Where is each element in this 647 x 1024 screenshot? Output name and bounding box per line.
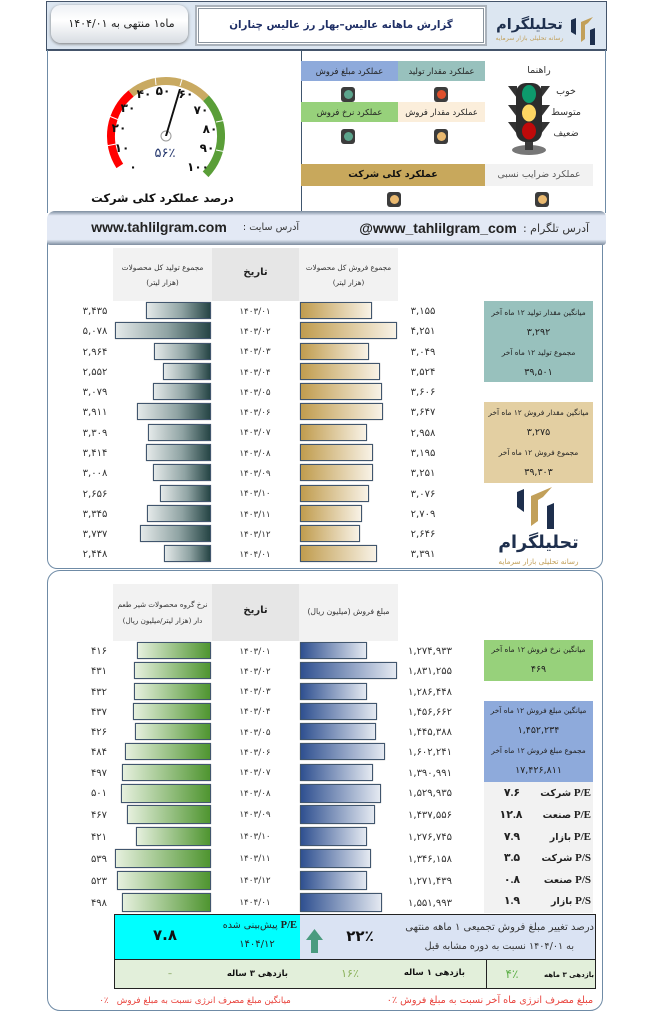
1-year label: بازدهی ۱ ساله xyxy=(404,968,465,978)
dates column xyxy=(239,306,271,560)
panel: sales change xyxy=(300,914,596,960)
date pill xyxy=(51,5,188,43)
summary: sales amount xyxy=(484,701,593,782)
indicator: ratios xyxy=(535,192,549,207)
dates column: ۱۴۰۳/۰۵ xyxy=(239,388,271,398)
panel: top header xyxy=(46,1,607,51)
label: production performance: عملکرد مقدار تولید xyxy=(409,66,474,76)
chart: production bars xyxy=(114,302,212,562)
table header: date xyxy=(212,248,299,301)
3-year value: – xyxy=(168,969,172,978)
summary: production: میانگین مقدار تولید ۱۲ ماه آخر xyxy=(491,308,586,317)
dates column 2: ۱۴۰۳/۰۳ xyxy=(239,687,271,697)
table header: production xyxy=(113,248,212,301)
summary: sales amount: ۱۷,۴۲۶,۸۱۱ xyxy=(515,765,562,776)
legend good: خوب xyxy=(556,86,576,97)
chart: gauge: ۰ xyxy=(129,160,137,174)
summary: sales quantity: ۳,۲۷۵ xyxy=(527,427,550,438)
production values xyxy=(83,306,107,560)
sales rate values: ۴۳۲ xyxy=(91,686,107,698)
panel: 3-year return xyxy=(114,959,301,989)
sales rate values: ۴۱۶ xyxy=(91,646,107,657)
production values: ۳,۳۴۵ xyxy=(83,509,107,520)
3-month value: ۴٪ xyxy=(506,967,518,981)
sales amount values: ۱,۳۴۶,۱۵۸ xyxy=(408,854,452,864)
chart: gauge: ۱۰۰ xyxy=(187,160,209,174)
panel: forecast P/E xyxy=(114,914,301,960)
production values: ۳,۳۰۹ xyxy=(83,428,107,438)
production values: ۳,۴۱۴ xyxy=(83,448,107,459)
P/S industry: P/S صنعت xyxy=(544,874,591,886)
chart: gauge: ۸۰ xyxy=(203,122,217,136)
dates column: ۱۴۰۳/۰۸ xyxy=(239,448,271,458)
dates column: ۱۴۰۳/۰۶ xyxy=(239,408,271,418)
dates column 2: ۱۴۰۴/۰۱ xyxy=(239,898,271,908)
icon: logo mark xyxy=(571,17,595,45)
indicator: sales quantity xyxy=(434,129,448,144)
sales rate values xyxy=(91,646,107,908)
sales rate values: ۵۳۹ xyxy=(91,854,107,864)
label: relative ratios performance: عملکرد ضرایب نسبی xyxy=(497,169,581,180)
P/E market: P/E بازار xyxy=(550,831,591,843)
dates column: ۱۴۰۳/۰۴ xyxy=(239,368,271,378)
production values: ۲,۵۵۲ xyxy=(83,367,107,378)
table header: date: تاریخ xyxy=(243,267,268,278)
indicator: sales amount xyxy=(341,87,355,102)
dates column 2: ۱۴۰۳/۰۷ xyxy=(239,768,271,778)
sales amount values: ۱,۸۳۱,۲۵۵ xyxy=(408,666,452,677)
P/E company: P/E شرکت xyxy=(540,787,591,799)
table header: rate: دار (هزار لیتر/میلیون ریال) xyxy=(123,616,202,625)
logo tagline large: رسانه تحلیلی بازار سرمایه xyxy=(498,557,579,566)
dates column: ۱۴۰۳/۰۲ xyxy=(239,326,271,336)
P/E market: ۷.۹ xyxy=(504,831,520,843)
forecast P/E value: ۷.۸ xyxy=(153,926,177,944)
label: sales amount performance xyxy=(301,61,398,81)
table header: sales: (هزار لیتر) xyxy=(333,278,364,287)
production values: ۵,۰۷۸ xyxy=(83,326,107,337)
chart: sales quantity bars xyxy=(300,302,398,562)
sales rate values: ۴۲۶ xyxy=(91,727,107,738)
chart: gauge: ۱۰ xyxy=(115,141,129,155)
summary: sales rate xyxy=(484,640,593,681)
change percent: ۲۲٪ xyxy=(346,927,374,945)
production values: ۳,۰۷۹ xyxy=(83,387,107,398)
P/E industry: P/E صنعت xyxy=(543,809,591,821)
sales amount values: ۱,۲۷۱,۴۳۹ xyxy=(408,876,452,886)
sales amount values: ۱,۳۹۰,۹۹۱ xyxy=(408,768,452,778)
website label: آدرس سایت : xyxy=(243,222,299,233)
P/S industry: ۰.۸ xyxy=(504,874,520,886)
summary: production: مجموع تولید ۱۲ ماه آخر xyxy=(502,348,575,357)
P/S company xyxy=(504,852,591,864)
sales amount values xyxy=(408,646,452,908)
sales amount values: ۱,۴۵۶,۶۶۲ xyxy=(408,706,452,718)
panel: top dashboard frame xyxy=(47,50,606,213)
report title xyxy=(195,5,487,46)
chart: sales amount bars xyxy=(300,642,398,912)
change description xyxy=(405,922,594,952)
summary: sales quantity xyxy=(484,402,593,483)
chart: gauge: ۲۰ xyxy=(112,121,126,135)
production values: ۳,۷۳۷ xyxy=(83,529,107,540)
chart: gauge: ۳۰ xyxy=(121,101,135,115)
website address: www.tahlilgram.com xyxy=(91,219,227,235)
sales rate values: ۵۲۳ xyxy=(91,876,107,886)
logo text: تحلیلگرام xyxy=(496,17,563,33)
dates column 2 xyxy=(239,646,271,908)
production values: ۳,۴۳۵ xyxy=(83,306,107,317)
logo tagline: رسانه تحلیلی بازار سرمایه xyxy=(496,35,563,42)
P/S market: ۱.۹ xyxy=(504,895,520,907)
sales rate values: ۴۳۱ xyxy=(91,666,107,677)
sales quantity values: ۲,۹۵۸ xyxy=(411,428,435,438)
dates column 2: ۱۴۰۳/۰۱ xyxy=(239,646,271,656)
gauge title: درصد عملکرد کلی شرکت xyxy=(91,191,234,205)
sales rate values: ۴۶۷ xyxy=(91,810,107,820)
sales quantity values: ۳,۲۵۱ xyxy=(411,468,435,479)
table header: sales amount xyxy=(299,584,398,641)
production values: ۳,۹۱۱ xyxy=(83,407,107,418)
dates column: ۱۴۰۳/۱۲ xyxy=(239,530,271,540)
sales quantity values: ۳,۰۴۹ xyxy=(411,346,435,358)
telegram address: @www_tahlilgram_com xyxy=(359,220,517,236)
indicator: sales rate xyxy=(341,129,355,144)
table header: sales: مجموع فروش کل محصولات xyxy=(306,263,391,272)
sales quantity values: ۳,۰۷۶ xyxy=(411,488,435,500)
chart: gauge: ۹۰ xyxy=(200,141,214,155)
note: last month energy cost: مبلغ مصرف انرژی ماه آخر نسبت به مبلغ فروش ٪۰ xyxy=(387,995,593,1006)
3-year label: بازدهی ۳ ساله xyxy=(227,969,288,979)
label: sales rate performance: عملکرد نرخ فروش xyxy=(317,107,382,117)
address band xyxy=(47,211,606,245)
table header: date 2: تاریخ xyxy=(243,605,268,616)
summary: sales quantity: ۳۹,۳۰۳ xyxy=(524,467,553,478)
label: sales rate performance xyxy=(301,102,398,122)
production values: ۲,۴۴۸ xyxy=(83,549,107,560)
legend weak: ضعیف xyxy=(553,128,579,139)
sales quantity values: ۴,۲۵۱ xyxy=(411,326,435,337)
3-month label: بازدهی ۳ ماهه xyxy=(544,971,594,979)
dates column: ۱۴۰۳/۰۹ xyxy=(239,468,271,478)
forecast date: ۱۴۰۴/۱۲ xyxy=(239,939,275,950)
sales rate values: ۴۸۴ xyxy=(91,747,107,758)
chart: gauge: ۶۰ xyxy=(179,87,193,101)
icon: logo mark large xyxy=(517,487,554,529)
1-year value: ۱۶٪ xyxy=(341,967,359,980)
summary: production: ۳,۲۹۲ xyxy=(527,327,550,338)
sales amount values: ۱,۲۸۶,۴۴۸ xyxy=(408,686,452,698)
panel: valuation ratios xyxy=(484,782,593,913)
panel: sales amount and rate xyxy=(47,570,603,1011)
P/S company: ۳.۵ xyxy=(504,852,520,864)
dates column: ۱۴۰۳/۱۰ xyxy=(239,489,271,499)
dates column 2: ۱۴۰۳/۰۶ xyxy=(239,748,271,758)
label: relative ratios performance xyxy=(485,164,593,186)
label: overall company performance xyxy=(301,164,485,186)
P/S market xyxy=(504,895,591,907)
dates column: ۱۴۰۳/۰۱ xyxy=(239,306,271,316)
sales amount values: ۱,۵۲۹,۹۳۵ xyxy=(408,788,452,799)
sales amount values: ۱,۲۷۴,۹۳۳ xyxy=(408,646,452,657)
sales amount values: ۱,۲۷۶,۷۴۵ xyxy=(408,832,452,842)
label: sales quantity performance: عملکرد مقدار فروش xyxy=(405,107,478,117)
sales quantity values: ۲,۷۰۹ xyxy=(411,509,435,520)
sales rate values: ۴۹۸ xyxy=(91,898,107,908)
telegram label: آدرس تلگرام : xyxy=(523,222,589,235)
sales rate values: ۴۳۷ xyxy=(91,706,107,718)
dates column 2: ۱۴۰۳/۰۸ xyxy=(239,788,271,798)
sales rate values: ۵۰۱ xyxy=(91,788,107,799)
change description: به ۱۴۰۴/۰۱ نسبت به دوره مشابه قبل xyxy=(425,941,574,952)
panel: 1-year return xyxy=(300,959,487,989)
P/S company: P/S شرکت xyxy=(542,852,591,864)
label: sales amount performance: عملکرد مبلغ فروش xyxy=(316,66,383,76)
sales quantity values: ۳,۱۹۵ xyxy=(411,448,435,459)
report title: گزارش ماهانه عالیس–بهار رز عالیس چناران xyxy=(229,19,453,31)
summary: production: ۳۹,۵۰۱ xyxy=(524,367,553,378)
dates column 2: ۱۴۰۳/۰۴ xyxy=(239,707,271,717)
dates column 2: ۱۴۰۳/۱۲ xyxy=(239,876,271,886)
summary: sales amount: مجموع مبلغ فروش ۱۲ ماه آخر xyxy=(491,746,586,755)
change description: درصد تغییر مبلغ فروش تجمیعی ۱ ماهه منتهی xyxy=(405,922,594,933)
dates column: ۱۴۰۴/۰۱ xyxy=(239,550,271,560)
table header: sales xyxy=(299,248,398,301)
chart: sales rate bars xyxy=(114,642,212,912)
chart: gauge: ۴۰ xyxy=(137,87,151,101)
dates column 2: ۱۴۰۳/۰۵ xyxy=(239,728,271,738)
table header: production: مجموع تولید کل محصولات xyxy=(122,263,203,272)
sales quantity values: ۳,۱۵۵ xyxy=(411,306,435,317)
production values: ۳,۰۰۸ xyxy=(83,468,107,479)
chart: gauge: ۷۰ xyxy=(194,103,208,117)
table header: production: (هزار لیتر) xyxy=(146,278,179,287)
forecast P/E label: P/E پیش‌بینی شده xyxy=(223,920,297,931)
production values: ۲,۹۶۴ xyxy=(83,346,107,358)
icon: up arrow xyxy=(306,929,323,953)
indicator: overall xyxy=(387,192,401,207)
logo: large xyxy=(498,487,579,566)
label: production performance xyxy=(398,61,485,81)
table header: sales amount: مبلغ فروش (میلیون ریال) xyxy=(307,607,390,616)
sales quantity values xyxy=(411,306,435,560)
sales amount values: ۱,۴۴۵,۳۸۸ xyxy=(408,727,452,738)
table header: date 2 xyxy=(212,584,299,641)
sales rate values: ۴۹۷ xyxy=(91,768,107,778)
logo text large: تحلیلگرام xyxy=(498,533,579,553)
P/E market xyxy=(504,831,591,843)
P/E industry: ۱۲.۸ xyxy=(500,809,522,821)
P/S market: P/S بازار xyxy=(551,895,591,907)
production values: ۲,۶۵۶ xyxy=(83,488,107,500)
label: overall company performance: عملکرد کلی شرکت xyxy=(348,169,438,180)
legend medium: متوسط xyxy=(551,107,581,118)
sales amount values: ۱,۶۰۲,۲۴۱ xyxy=(408,747,452,758)
dates column 2: ۱۴۰۳/۱۰ xyxy=(239,832,271,842)
dates column: ۱۴۰۳/۱۱ xyxy=(239,510,271,520)
sales quantity values: ۳,۳۹۱ xyxy=(411,549,435,560)
summary: sales quantity: مجموع فروش ۱۲ ماه آخر xyxy=(499,448,578,457)
panel: 3-month return xyxy=(486,959,596,989)
chart: gauge: ۵۰ xyxy=(156,84,170,98)
P/E company: ۷.۶ xyxy=(504,787,520,799)
table header: rate: نرخ گروه محصولات شیر طعم xyxy=(118,600,207,609)
summary: sales amount: میانگین مبلغ فروش ۱۲ ماه آخر xyxy=(491,706,586,715)
sales quantity values: ۲,۶۴۶ xyxy=(411,529,435,540)
table header: rate xyxy=(113,584,212,641)
summary: sales rate: ۴۶۹ xyxy=(531,664,546,675)
summary: sales amount: ۱,۴۵۲,۲۳۴ xyxy=(518,725,559,736)
P/E industry xyxy=(500,809,591,821)
dates column: ۱۴۰۳/۰۳ xyxy=(239,347,271,357)
indicator: production xyxy=(434,87,448,102)
note: average energy cost: میانگین مبلغ مصرف انرژی نسبت به مبلغ فروش ٪۰ xyxy=(99,996,291,1006)
summary: sales rate: میانگین نرخ فروش ۱۲ ماه آخر xyxy=(491,645,586,654)
icon: traffic light xyxy=(508,83,550,155)
dates column: ۱۴۰۳/۰۷ xyxy=(239,428,271,438)
P/S industry xyxy=(504,874,591,886)
sales amount values: ۱,۵۵۱,۹۹۳ xyxy=(408,898,452,908)
label: sales quantity performance xyxy=(398,102,485,122)
panel: monthly production and sales xyxy=(47,236,603,569)
sales quantity values: ۳,۶۰۶ xyxy=(411,387,435,398)
legend title: راهنما xyxy=(527,65,551,76)
dates column 2: ۱۴۰۳/۰۹ xyxy=(239,810,271,820)
dates column 2: ۱۴۰۳/۱۱ xyxy=(239,854,271,864)
summary: sales quantity: میانگین مقدار فروش ۱۲ ماه آخر xyxy=(488,408,589,417)
sales quantity values: ۳,۵۲۴ xyxy=(411,367,435,378)
sales rate values: ۴۲۱ xyxy=(91,832,107,842)
sales amount values: ۱,۴۳۷,۵۵۶ xyxy=(408,810,452,820)
chart: gauge xyxy=(106,77,225,178)
date pill: ماه۱ منتهی به ۱۴۰۴/۰۱ xyxy=(68,17,175,30)
P/E company xyxy=(504,787,591,799)
sales quantity values: ۳,۶۴۷ xyxy=(411,407,435,418)
chart: gauge: ۵۶٪ xyxy=(155,146,175,161)
dates column 2: ۱۴۰۳/۰۲ xyxy=(239,666,271,676)
summary: production xyxy=(484,301,593,382)
